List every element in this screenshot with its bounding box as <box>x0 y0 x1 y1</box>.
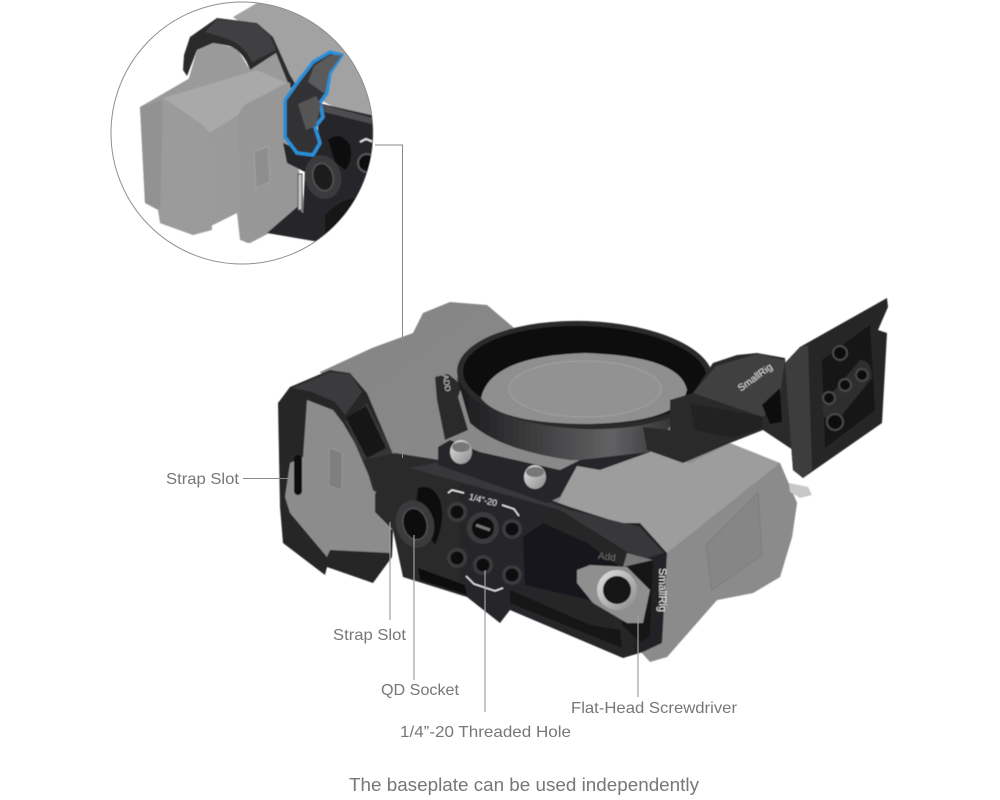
cage frame <box>278 370 400 583</box>
battery door in cage <box>285 400 390 557</box>
arm SmallRig logo: SmallRig <box>736 362 775 394</box>
camera eyelet <box>789 483 812 498</box>
recess and lower slots <box>523 523 620 600</box>
lens ring band <box>457 372 713 460</box>
add label: Add <box>597 551 616 564</box>
leader: flat-head screwdriver <box>637 615 639 697</box>
blue latch highlight <box>285 52 342 155</box>
arm top face <box>693 354 785 417</box>
background inside arch <box>188 42 285 79</box>
camera top face <box>555 443 780 553</box>
battery door in inset <box>238 83 306 243</box>
QD ring in inset <box>304 155 342 199</box>
baseplate thread markings <box>448 490 519 591</box>
leader: strap slot left <box>243 478 290 480</box>
cage arch in inset <box>183 18 296 88</box>
slot in inset <box>328 136 351 170</box>
cage top highlight <box>292 372 362 415</box>
left clamp <box>435 374 468 440</box>
camera with cage <box>278 298 888 662</box>
arm mount <box>643 353 793 463</box>
baseplate <box>363 453 667 658</box>
label: strap slot left: Strap Slot <box>166 471 240 488</box>
label: strap slot lower: Strap Slot <box>333 627 407 644</box>
plate raised pad <box>822 360 872 421</box>
strap slot on frame <box>294 455 302 495</box>
threaded holes <box>447 502 522 585</box>
leader: inset to latch <box>375 145 402 458</box>
plate holes <box>823 346 868 430</box>
caption: The baseplate can be used independently <box>349 775 699 795</box>
inset circle: battery latch detail <box>111 0 380 264</box>
side latch <box>345 403 407 508</box>
camera with cage: ADD <box>441 374 452 392</box>
leader: threaded hole <box>484 570 486 712</box>
label: QD socket: QD Socket <box>381 682 460 699</box>
battery in inset <box>140 78 291 242</box>
vertical plate <box>785 298 888 478</box>
screw clamp <box>438 440 650 503</box>
slot in baseplate <box>416 487 442 545</box>
screw post in inset <box>298 174 302 210</box>
leader: strap slot lower <box>389 522 391 620</box>
dark pocket around screw <box>622 553 653 642</box>
QD socket ring <box>390 496 440 552</box>
camera side panel <box>650 463 797 660</box>
flat-head screw plate <box>577 565 650 623</box>
SmallRig logo: SmallRig <box>656 568 668 612</box>
thread hole in inset <box>358 154 376 172</box>
lens ring <box>455 317 715 433</box>
baseplate in inset <box>267 103 380 243</box>
lens cap <box>481 353 687 424</box>
inset circle outline <box>111 2 373 264</box>
screws <box>450 440 546 489</box>
camera body <box>320 302 797 662</box>
latch foot block <box>375 493 412 532</box>
baseplate thread label: 1/4"-20 <box>468 492 498 508</box>
label: threaded hole: 1/4”-20 Threaded Hole <box>400 724 571 741</box>
camera body in inset <box>232 3 372 116</box>
label: flat-head screwdriver: Flat-Head Screwdriver <box>571 700 738 717</box>
leader: QD socket <box>413 535 415 680</box>
